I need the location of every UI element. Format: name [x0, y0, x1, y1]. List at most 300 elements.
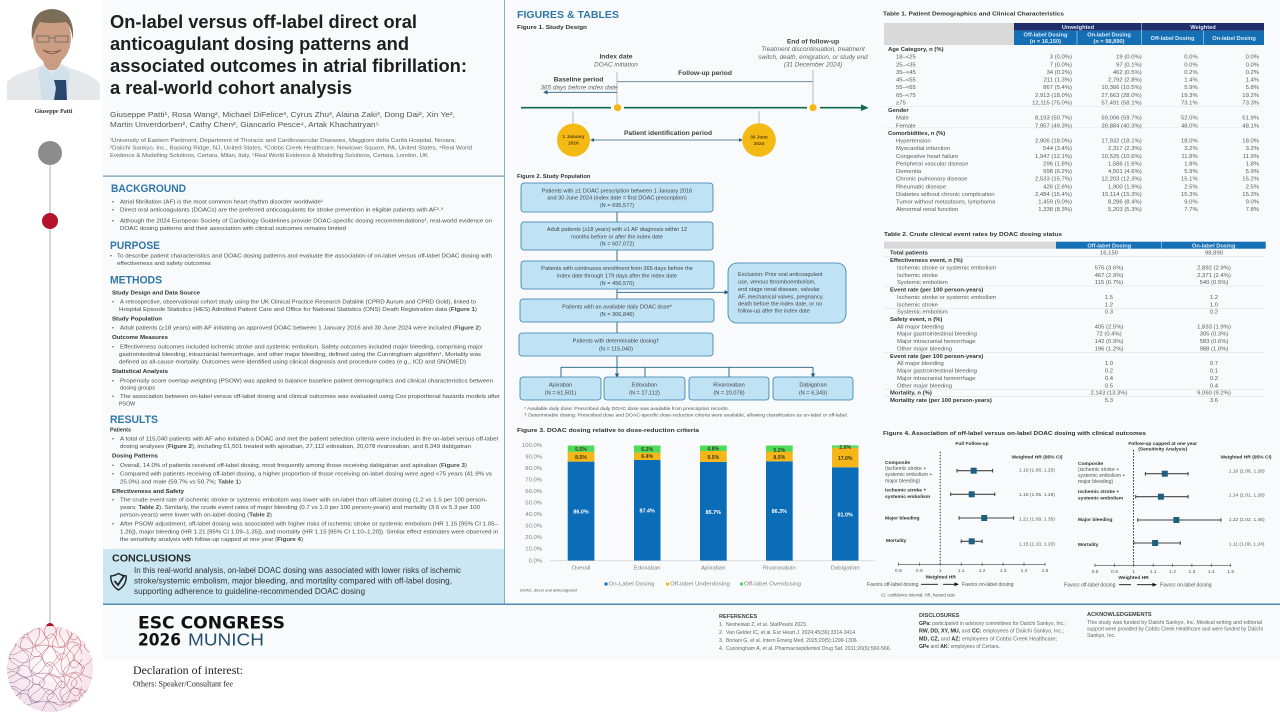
results text: Overall, 14.0% of patients received off-label dosing, most frequently among those receiving dabigatran and apixaban ( Figure 3 ) [120, 463, 467, 469]
table 1 values: unweighted on-label: 4,501 (4.6%) [1108, 169, 1142, 175]
table 2 values: off-label: 196 (1.2%) [1095, 346, 1123, 352]
forest plot: full follow-up: (ischemic stroke + [885, 466, 926, 472]
bar: overall [568, 446, 594, 571]
bar: edoxaban: 6.2% [641, 447, 653, 453]
table 1 row labels: Male [896, 116, 909, 122]
table 1 values: unweighted off-label: 2,484 (15.4%) [1035, 192, 1072, 198]
timeline labels: 2024 [754, 141, 765, 146]
timeline labels: Treatment discontinuation, treatment [761, 46, 865, 53]
affiliations: ¹University of Eastern Piedmont, Department of Thoracic and Cardiovascular Diseases, Maggiore della Carità Hospital, Novara; [110, 138, 456, 144]
bar: dabigatran [831, 445, 860, 571]
table 1 values: unweighted off-label: 7,957 (49.3%) [1035, 123, 1072, 129]
table 2 values: off-label: 1.0 [1105, 361, 1114, 367]
table 1 row labels: Tumor without metastases, lymphoma [896, 200, 996, 206]
background text: DOAC dosing patterns and their association with clinical outcomes remains limited [120, 226, 346, 232]
timeline labels: switch, death, emigration, or study end [758, 54, 868, 61]
results text: Compared with patients receiving off-label dosing, a higher proportion of those receiving on-label dosing were aged <75 years (41.9% vs [120, 472, 492, 478]
forest plot: capped at one year: 1.22 (1.02, 1.45) [1229, 517, 1265, 523]
methods text: Effectiveness outcomes included ischemic stroke and systemic embolism. Safety outcomes included major bleeding, comprising major [120, 344, 483, 350]
table 1 values: unweighted off-label: 296 (1.8%) [1043, 161, 1072, 167]
timeline labels: Follow-up period [678, 70, 732, 77]
references: Van Gelder IC, et al. Eur Heart J. 2024;45(36):3314-3414 [726, 630, 855, 636]
table 2 header: On-label Dosing [1192, 243, 1236, 249]
table 1 values: weighted on-label: 73.3% [1242, 100, 1260, 106]
chart legend [604, 582, 801, 588]
references: 3. [719, 638, 723, 644]
bar: dabigatran: 17.0% [838, 456, 853, 462]
timeline labels: DOAC initiation [594, 62, 638, 69]
flow box text: use, venous thromboembolism, [738, 280, 816, 286]
logo: ESC Congress 2026 Munich: 2026 [138, 630, 181, 650]
table 1 values: unweighted off-label: 426 (2.6%) [1043, 184, 1072, 190]
table 2 values: off-label: 467 (2.9%) [1095, 273, 1123, 279]
table 2 values: off-label: 16,150 [1100, 251, 1119, 257]
purpose text [110, 253, 492, 267]
forest plot: full follow-up: Favors on-label dosing [962, 582, 1014, 588]
timeline markers [557, 104, 817, 157]
table 2 values: on-label: 98,890 [1205, 251, 1224, 257]
table 1 header: Unweighted [1062, 25, 1095, 31]
table 2 row labels: Ischemic stroke or systemic embolism [897, 295, 996, 301]
table 1 row labels: Dementia [896, 169, 922, 175]
table 2 row labels: Major gastrointestinal bleeding [897, 332, 977, 338]
table 2 row labels: Safety event, n (%) [890, 317, 942, 323]
table 1 values: weighted off-label: 0.2% [1184, 70, 1198, 76]
flow box text: (N = 306,846) [600, 312, 634, 318]
bar: dabigatran: 81.0% [838, 512, 853, 518]
table 1 values: unweighted off-label: 3 (0.0%) [1050, 55, 1072, 61]
table 1 row labels: 45–<55 [896, 78, 917, 84]
table 1 row labels: 55–<65 [896, 85, 917, 91]
flow box text: months before or after the index date [571, 234, 663, 240]
declaration of interest: Declaration of interest: [133, 665, 243, 677]
timeline labels: Baseline period [554, 77, 603, 84]
table 1 values: weighted off-label [1181, 55, 1198, 213]
table 1 values: unweighted on-label: 2,317 (2.3%) [1108, 146, 1142, 152]
results text: years; Table 2 ). Similarly, the crude event rates of major bleeding (0.7 vs 1.0 per 100 person-years) and mortality (3.6 vs 5.3 per 100 [120, 505, 480, 511]
table 1 values: unweighted on-label: 5,203 (5.3%) [1108, 207, 1142, 213]
table 1 values: unweighted off-label: 7 (0.0%) [1050, 62, 1072, 68]
table 1 header: (n = 16,150) [1030, 39, 1061, 45]
references: 1. [719, 622, 723, 628]
table 1 values: weighted off-label: 2.5% [1184, 184, 1198, 190]
table 1 row labels: Myocardial infarction [896, 146, 950, 152]
figure 3 footnote: DOAC, direct oral anticoagulant [520, 588, 578, 592]
forest plot: capped at one year: 1.4 [1208, 569, 1215, 575]
references: Cunningham A, et al. Pharmacoepidemiol Drug Saf. 2011;20(6):560-566. [726, 646, 891, 652]
forest plot: full follow-up: Major bleeding [885, 516, 920, 522]
figure 2: study population [517, 174, 853, 417]
y axis labels: 0.0% [529, 558, 543, 564]
forest plot: full follow-up: 0.9 [916, 568, 923, 574]
forest plot: full follow-up [867, 441, 1063, 598]
table 1 row labels: 18–<25 [896, 55, 917, 61]
methods text: • [112, 344, 114, 350]
flow box text: Patients with ≥1 DOAC prescription between 1 January 2016 [542, 188, 692, 194]
table 1 row labels: Female [896, 123, 916, 129]
flow box text: follow-up after the index date [738, 309, 810, 315]
logo: ESC Congress 2026 Munich [138, 612, 285, 650]
background text: • [112, 219, 114, 225]
table 1 values: unweighted on-label: 17,932 (18.1%) [1101, 139, 1142, 145]
disclosures: RW, DD, XY, MU, and CC: employees of Daiichi Sankyo, Inc.; [919, 629, 1064, 635]
title: On-label versus off-label direct oral [110, 11, 417, 32]
background text: Although the 2024 European Society of Cardiology Guidelines provide DOAC-specific dosing recommendations², real-world evidence on [120, 219, 492, 225]
table 2 row labels: Effectiveness event, n (%) [890, 258, 963, 264]
table 1 values: unweighted off-label: 12,115 (75.0%) [1032, 100, 1072, 106]
table 1 row labels: Rheumatic disease [896, 184, 947, 190]
table 2 row labels: All major bleeding [897, 324, 944, 330]
results text: • [112, 472, 114, 478]
methods text: Study Design and Data Source [112, 290, 200, 296]
acknowledgements [1087, 612, 1263, 639]
table 2 values: on-label: 540 (0.5%) [1200, 280, 1228, 286]
table 2 row labels: Total patients [890, 251, 929, 257]
bar: apixaban: Apixaban [701, 565, 726, 571]
bar: edoxaban: 87.4% [640, 508, 655, 514]
table 2 row labels: Systemic embolism [897, 280, 948, 286]
affiliations: ²Daiichi Sankyo, Inc., Basking Ridge, NJ, United States, ³Cobbs Creek Healthcare, Newtown Square, PA, United States, ⁴Real World [110, 146, 472, 152]
bar: rivaroxaban [763, 446, 796, 571]
table 1 values: weighted on-label: 15.2% [1242, 177, 1260, 183]
table 1 values: weighted off-label: 15.1% [1181, 177, 1198, 183]
flow box text: Apixaban [549, 383, 572, 389]
table 1 values: weighted off-label: 52.0% [1181, 116, 1198, 122]
forest plot: full follow-up: 1.15 (1.10, 1.20) [1019, 541, 1055, 547]
bar: overall: 8.5% [575, 455, 587, 461]
table 2 values: on-label: 988 (1.0%) [1200, 346, 1228, 352]
flow box text: death before the index date, or no [738, 302, 822, 308]
references: REFERENCES [719, 614, 757, 620]
table 2 values: on-label: 305 (0.3%) [1200, 332, 1228, 338]
session timeline [38, 141, 62, 631]
table 1 values: weighted on-label: 11.9% [1243, 154, 1260, 160]
table 2 row labels: Event rate (per 100 person-years) [890, 288, 983, 294]
disclosures [919, 613, 1066, 650]
forest plot: full follow-up: Favors off-label dosing [867, 582, 919, 588]
results text: dosing analyses ( Figure 2 ), including 61,501 treated with apixaban, 27,112 edoxaban, 20,078 rivaroxaban, and 6,349 dabigatran [120, 444, 471, 450]
acknowledgements: Sankyo, Inc. [1087, 633, 1116, 639]
figure 2 footnotes: † Determinable dosing: Prescribed dose and DOAC-specific dose-reduction criteria were available, allowing classification as on-label or off-label. [524, 412, 848, 417]
references: 2. [719, 630, 723, 636]
timeline labels: Index date [599, 54, 633, 61]
table 1 values: unweighted on-label: 1,586 (1.6%) [1108, 161, 1142, 167]
table 2 values: on-label: 0.1 [1210, 368, 1218, 374]
table 1 values: unweighted off-label: 34 (0.2%) [1046, 70, 1072, 76]
timeline labels: (31 December 2024) [784, 62, 842, 69]
results text: 25.0%) and male (59.7% vs 50.7%; Table 1 ) [120, 479, 241, 485]
background text: Direct oral anticoagulants (DOACs) are the preferred anticoagulants for stroke prevention in eligible patients with AF²˒³ [120, 208, 443, 214]
timeline labels: 30 June [750, 134, 768, 140]
panel: background [111, 183, 492, 232]
table 1 values: weighted off-label: 48.0% [1181, 123, 1198, 129]
methods text: Propensity score overlap weighting (PSOW) was applied to balance baseline patient demographics and clinical characteristics between [120, 378, 493, 384]
table 1 row labels: 25–<35 [896, 62, 917, 68]
table 1 values: weighted off-label: 1.4% [1184, 78, 1198, 84]
table 1 values: unweighted on-label: 97 (0.1%) [1116, 62, 1142, 68]
table 1 values: weighted on-label: 51.9% [1242, 116, 1260, 122]
acknowledgements: support were provided by Cobbs Creek Healthcare and were funded by Daiichi [1087, 626, 1263, 632]
timeline labels: Patient identification period [624, 130, 712, 137]
panel: title block [103, 11, 504, 177]
table 1 values: unweighted off-label: 867 (5.4%) [1043, 85, 1072, 91]
forest plot: full follow-up: Composite [885, 460, 911, 466]
forest plot: full follow-up: 1 [939, 568, 942, 574]
table 2 values: on-label: 1.2 [1210, 295, 1218, 301]
bar: rivaroxaban: 5.2% [773, 448, 786, 454]
table 2: crude clinical event rates [884, 232, 1266, 404]
y axis labels: 30.0% [525, 524, 543, 530]
affiliations [110, 138, 472, 159]
methods text: defined as all-cause mortality. Outcomes were identified using clinical diagnosis and procedure codes (e.g., ICD and SNOMED) [119, 359, 466, 365]
table 2 row labels: Systemic embolism [897, 310, 948, 316]
table 1 values: weighted off-label: 19.3% [1181, 93, 1198, 99]
table 2 values: off-label: 115 (0.7%) [1095, 280, 1123, 286]
results text: • [112, 522, 114, 528]
table 2 row labels: Other major bleeding [897, 346, 952, 352]
methods text: • [112, 326, 114, 332]
forest plot: full follow-up: Mortality [886, 538, 907, 544]
table 1 values: weighted off-label: 73.1% [1181, 100, 1198, 106]
table 2 title: Table 2. Crude clinical event rates by DOAC dosing status [884, 232, 1062, 238]
y axis labels: 80.0% [525, 466, 543, 472]
background text: Atrial fibrillation (AF) is the most common heart rhythm disorder worldwide¹ [120, 200, 323, 206]
timeline labels: 2016 [568, 140, 579, 146]
conclusions text: stroke/systemic embolism, major bleeding, and mortality compared with off-label dosing, [134, 576, 452, 585]
title: associated outcomes in atrial fibrillation: [110, 55, 467, 76]
flow box text: (N = 695,577) [600, 203, 634, 209]
timeline labels: End of follow-up [787, 38, 839, 46]
results text: 1.26]), major bleeding (HR 1.21 [95% CI 1.09–1.35]), and mortality (HR 1.15 [95% CI 1.10–1.20]). Similar effect estimates were observed in [120, 529, 498, 535]
table 2 row labels: Mortality rate (per 100 person-years) [890, 398, 992, 404]
table 2 values: off-label: 0.4 [1105, 376, 1114, 382]
results text: • [112, 498, 114, 504]
table 1 values: weighted on-label [1242, 55, 1260, 213]
heading: purpose: PURPOSE [110, 240, 160, 252]
flow box text: Adult patients (≥18 years) with ≥1 AF diagnosis within 12 [547, 227, 687, 233]
table 2 row labels: Ischemic stroke [897, 302, 939, 308]
flow box text: index date through 179 days after the index date [557, 273, 677, 279]
flow boxes [519, 183, 853, 400]
timeline labels: 365 days before index date [540, 84, 618, 91]
y axis labels: 40.0% [525, 512, 543, 518]
results text: A total of 115,040 patients with AF who initiated a DOAC and met the patient selection criteria were included in the on-label versus off-label [120, 437, 498, 443]
flow box text: (N = 607,072) [600, 242, 634, 248]
figure 2 footnotes [524, 406, 848, 417]
forest plot: full follow-up: CI, confidence interval; HR, hazard ratio [881, 593, 956, 598]
methods text: Adult patients (≥18 years) with AF initiating an approved DOAC between 1 January 2016 and 30 June 2024 were included ( Figure 2 ) [120, 326, 481, 332]
table 1 header [884, 23, 1264, 45]
table 1 values: unweighted on-label: 15,114 (15.3%) [1102, 192, 1142, 198]
table 1 values: weighted on-label: 1.4% [1246, 78, 1260, 84]
title: a real-world cohort analysis [110, 77, 352, 98]
forest plot: full follow-up: 1.2 [979, 568, 986, 574]
table 2 values: off-label: 2,143 (13.3%) [1090, 391, 1128, 397]
title: anticoagulant dosing patterns and [110, 33, 409, 54]
bar: edoxaban: 6.4% [641, 454, 653, 460]
bar: rivaroxaban: 86.3% [772, 509, 787, 515]
table 1 values: unweighted off-label: 2,913 (18.0%) [1035, 93, 1072, 99]
table 1 values: weighted off-label: 3.2% [1184, 146, 1198, 152]
forest plot: capped at one year [1064, 441, 1272, 588]
flow box text: Rivaroxaban [713, 383, 745, 389]
table 1 values: weighted on-label: 0.0% [1246, 62, 1260, 68]
table 1 row labels: Hypertension [896, 139, 931, 145]
methods text: • [112, 394, 114, 400]
forest plot: capped at one year: 1.5 [1227, 569, 1234, 575]
purpose text: • [110, 253, 112, 259]
forest plot: capped at one year: Weighted HR (95% CI) [1220, 454, 1272, 460]
table 1 row labels [888, 47, 996, 213]
authors: Martin Unverdorben², Cathy Chen², Giancarlo Pesce⁴, Artak Khachatryan⁵ [110, 120, 379, 129]
panel: purpose [110, 240, 492, 267]
table 1 values: unweighted off-label: 544 (3.4%) [1043, 146, 1072, 152]
table 1 row labels: Diabetes without chronic complication [896, 192, 995, 198]
flow box text [541, 188, 827, 396]
flow box text: (N = 115,040) [599, 346, 633, 352]
table 1 values: weighted off-label: 18.0% [1181, 139, 1198, 145]
conclusions text: In this real-world analysis, on-label DOAC dosing was associated with lower risks of ischemic [134, 566, 461, 575]
table 1 values: weighted off-label: 5.9% [1184, 85, 1198, 91]
table 1 header: (n = 98,890) [1093, 39, 1125, 45]
forest plot: full follow-up: Weighted HR (95% CI) [1012, 454, 1063, 460]
table 1 values: unweighted off-label: 1,338 (8.3%) [1038, 207, 1072, 213]
heading: figures and tables: FIGURES & TABLES [517, 9, 619, 21]
table 1 values: unweighted off-label: 2,533 (15.7%) [1035, 177, 1072, 183]
table 1 values: weighted on-label: 3.2% [1246, 146, 1260, 152]
table 1 values: weighted off-label: 0.0% [1184, 62, 1198, 68]
table 2 values: off-label: 576 (3.6%) [1095, 265, 1123, 271]
chart legend: Off-label Underdosing [670, 582, 730, 588]
logo: ESC Congress 2026 Munich: ESC CONGRESS [138, 612, 285, 632]
methods text: Outcome Measures [112, 335, 168, 341]
table 1 header: On-label Dosing [1087, 32, 1131, 38]
results text: After PSOW adjustment, off-label dosing was associated with higher risks of ischemic stroke or systemic embolism (HR 1.15 [95% CI 1.05– [120, 522, 498, 528]
conclusions text: supporting adherence to guideline-recommended DOAC dosing [134, 587, 365, 596]
panel: conclusions [103, 549, 504, 604]
table 1 values: unweighted off-label: 1,947 (12.1%) [1035, 154, 1072, 160]
table 2 values: off-label: 0.2 [1105, 368, 1113, 374]
table 2 values: off-label: 5.3 [1105, 398, 1114, 404]
forest plot: capped at one year: Favors off-label dosing [1064, 582, 1116, 588]
figure 1 title: Figure 1. Study Design [517, 25, 588, 31]
table 2 row labels: Other major bleeding [897, 383, 952, 389]
forest plot: full follow-up: Full Follow-up [955, 441, 989, 447]
timeline labels: 1 January [563, 134, 585, 139]
table 1 values: unweighted off-label: 2,906 (18.0%) [1035, 139, 1072, 145]
forest plot: full follow-up: systemic embolism [885, 494, 931, 500]
forest plot: capped at one year: 1.14 (1.01, 1.28) [1229, 492, 1265, 498]
y axis labels: 100.0% [522, 443, 543, 449]
forest plot: full follow-up: Ischemic stroke + [885, 488, 926, 494]
bar: apixaban: 85.7% [706, 510, 721, 516]
table 2 values: off-label: 0.3 [1105, 310, 1114, 316]
references: Boriani G, et al. Intern Emerg Med. 2025;20(5):1299-1306. [726, 638, 858, 644]
authors [110, 110, 455, 129]
timeline labels [540, 38, 868, 146]
panel: presenter sidebar [4, 9, 100, 716]
table 1 values: weighted on-label: 19.2% [1242, 93, 1260, 99]
forest plot: capped at one year: Follow-up capped at one year [1128, 441, 1197, 447]
table 1 values: unweighted off-label: 8,193 (50.7%) [1035, 116, 1072, 122]
table 2 row labels: Ischemic stroke [897, 273, 939, 279]
bar: overall: 86.0% [573, 510, 589, 516]
forest plot: full follow-up: 1.21 (1.09, 1.35) [1019, 517, 1055, 523]
forest plot: full follow-up: 0.8 [895, 568, 902, 574]
forest plot: capped at one year: 1.3 [1188, 569, 1196, 575]
table 2 values: off-label: 0.5 [1105, 383, 1114, 389]
results text [110, 427, 498, 543]
forest plot: capped at one year: Favors on-label dosing [1160, 582, 1212, 588]
table 2 values: on-label: 0.7 [1210, 361, 1218, 367]
forest plot: capped at one year: 1.16 (1.06, 1.28) [1229, 468, 1265, 474]
table 2 values: on-label: 1,833 (1.9%) [1197, 324, 1231, 330]
forest plot: full follow-up: 1.16 (1.08, 1.25) [1019, 468, 1055, 474]
declaration of interest [133, 665, 243, 688]
y axis labels [522, 443, 543, 564]
table 1 values: weighted off-label: 11.8% [1181, 154, 1198, 160]
heading: results: RESULTS [110, 414, 158, 426]
table 1 row labels: Congestive heart failure [896, 154, 959, 160]
forest plot: capped at one year: Ischemic stroke + [1078, 489, 1119, 495]
figure 2 title: Figure 2. Study Population [517, 174, 591, 180]
purpose text: effectiveness and safety outcomes [117, 261, 211, 267]
forest plot: full follow-up: Weighted HR [926, 574, 956, 580]
table 1 values: weighted on-label: 5.9% [1246, 169, 1260, 175]
table 2 row labels [890, 251, 996, 404]
bar: rivaroxaban: 8.5% [773, 455, 786, 461]
methods text: Statistical Analysis [112, 369, 168, 375]
table 2 row labels: Major intracranial hemorrhage [897, 376, 976, 382]
flow box text: AF, mechanical valves, pregnancy, [738, 294, 824, 300]
results text: • [112, 437, 114, 443]
background text: • [112, 200, 114, 206]
results text: The crude event rate of ischemic stroke or systemic embolism was lower with on-label than off-label dosing (1.2 vs 1.5 per 100 person- [120, 498, 487, 504]
table 2 values: on-label: 3.6 [1210, 398, 1219, 404]
table 1 values: unweighted on-label: 59,006 (59.7%) [1101, 116, 1142, 122]
forest plot: full follow-up: 1.5 [1042, 568, 1049, 574]
table 1 values: weighted off-label: 7.7% [1184, 207, 1198, 213]
flow box text: Exclusion: Prior oral anticoagulant [738, 272, 823, 278]
table 1 values: unweighted off-label: 211 (1.3%) [1044, 78, 1072, 84]
forest plot: capped at one year: 1.11 (1.00, 1.24) [1229, 542, 1265, 548]
table 2 row labels: Event rate (per 100 person-years) [890, 354, 983, 360]
bar: apixaban: 4.8% [707, 446, 720, 452]
forest plot: full follow-up: major bleeding) [885, 478, 920, 484]
methods text: The association between on-label versus off-label dosing and clinical outcomes was evaluated using Cox proportional hazards models after [120, 394, 500, 400]
table 1 row labels: Abnormal renal function [896, 207, 958, 213]
table 1 header: Off-label Dosing [1024, 32, 1068, 38]
table 1 header: On-label Dosing [1212, 36, 1256, 42]
table 1 values: unweighted off-label: 1,459 (9.0%) [1038, 200, 1072, 206]
table 2 values: on-label: 1.0 [1210, 302, 1219, 308]
figure 4 title: Figure 4. Association of off-label versus on-label DOAC dosing with clinical outcomes [883, 431, 1146, 437]
chart legend: On-Label Dosing [608, 582, 654, 588]
y axis labels: 70.0% [525, 478, 543, 484]
forest plot: capped at one year: Composite [1078, 461, 1104, 467]
purpose text: To describe patient characteristics and DOAC dosing patterns and evaluate the association of on-label versus off-label DOAC dosing with [117, 253, 492, 259]
results text: Dosing Patterns [112, 453, 158, 459]
flow box text: (N = 456,570) [600, 281, 634, 287]
references: 4. [719, 646, 723, 652]
table 1 row labels: ≥75 [896, 100, 907, 106]
table 2 row labels: Ischemic stroke or systemic embolism [897, 265, 996, 271]
table 2 values: off-label: 405 (2.5%) [1095, 324, 1123, 330]
methods text: A retrospective, observational cohort study using the UK Clinical Practice Research Datalink (CPRD Aurum and CPRD Gold), linked to [120, 300, 476, 306]
table 2 values: off-label: 72 (0.4%) [1096, 332, 1122, 338]
figure 1: study design [517, 25, 868, 157]
forest plot: capped at one year: systemic embolism [1078, 495, 1124, 501]
